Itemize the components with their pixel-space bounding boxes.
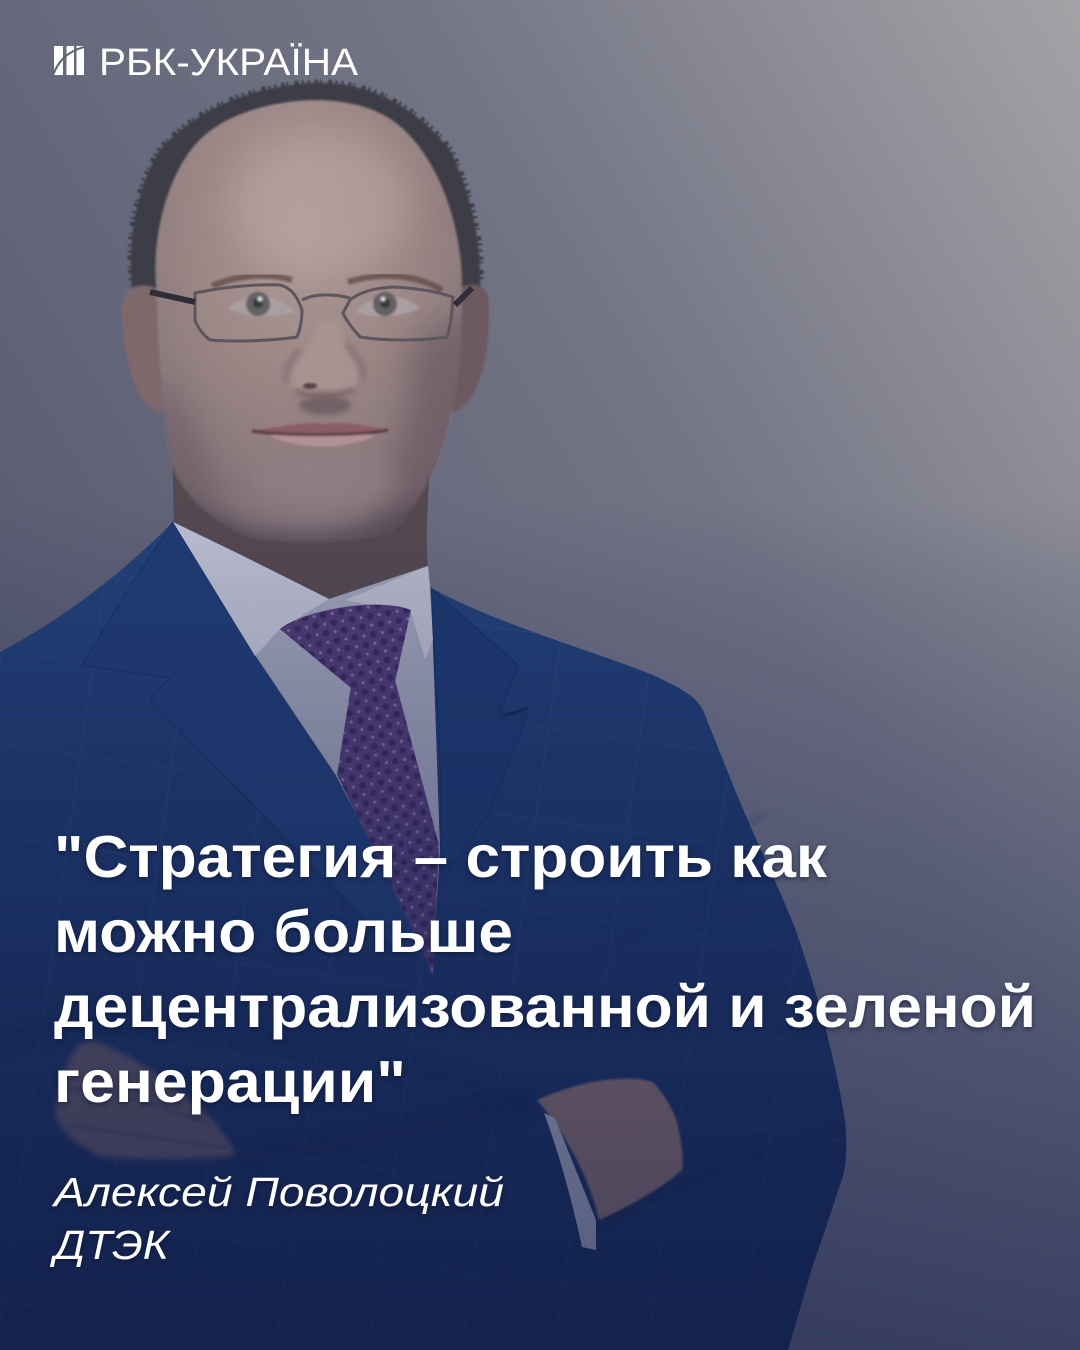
quote: "Стратегия – строить как	[54, 824, 827, 890]
lapel notch mark	[503, 708, 528, 716]
shirt collar	[173, 522, 433, 659]
nose	[287, 320, 363, 415]
mouth	[252, 423, 388, 446]
logo РБК-УКРАЇНА	[54, 42, 359, 84]
face shading	[162, 142, 462, 542]
logo wordmark: РБК-УКРАЇНА	[99, 42, 359, 84]
left eye	[228, 292, 295, 316]
speaker name and company: ДТЭК	[50, 1222, 172, 1268]
left ear	[121, 285, 172, 412]
suit jacket	[0, 522, 846, 1350]
necktie	[280, 605, 439, 978]
speaker name and company	[50, 1169, 504, 1268]
hair	[131, 83, 480, 292]
quote	[54, 824, 1036, 1115]
man in blue suit	[0, 83, 846, 1350]
left eyebrow	[212, 276, 292, 286]
right ear	[445, 284, 489, 412]
glasses	[150, 285, 472, 341]
right eye	[356, 292, 420, 316]
quote: децентрализованной и зеленой	[54, 974, 1036, 1040]
shirt	[173, 522, 442, 965]
speaker name and company: Алексей Поволоцкий	[51, 1169, 504, 1215]
face	[150, 100, 480, 560]
left hand	[55, 1040, 234, 1159]
quote: генерации"	[54, 1049, 406, 1115]
quote: можно больше	[54, 899, 513, 965]
neck	[172, 440, 432, 602]
right hand	[537, 1079, 683, 1220]
shirt cuff	[544, 1113, 596, 1250]
right eyebrow	[348, 276, 442, 290]
left lapel	[82, 522, 433, 962]
arm fold shadows	[590, 815, 775, 960]
right lapel	[431, 588, 528, 880]
logo mark	[53, 46, 84, 75]
